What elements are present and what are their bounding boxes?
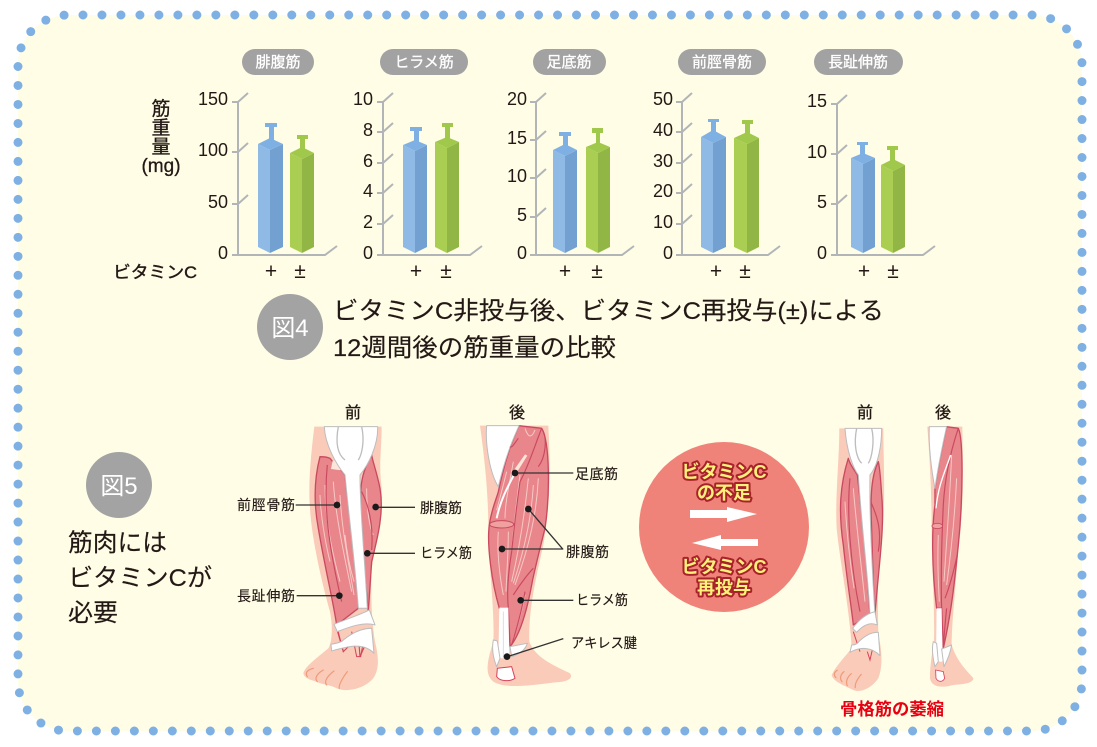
bar chart: soleus: 8	[363, 120, 373, 140]
arrow: to atrophy	[690, 507, 757, 522]
bar chart: plantaris: ±	[591, 260, 603, 283]
figure 5 caption: 筋肉には	[68, 529, 167, 557]
illustration: healthy leg, front: 前脛骨筋	[237, 497, 295, 513]
bar chart: soleus: 0	[363, 243, 373, 263]
bar chart: soleus	[353, 49, 482, 283]
circle: vitamin C deficiency and re-administration: ビタミンC	[682, 556, 766, 577]
illustration: healthy leg, back: 足底筋	[575, 466, 618, 482]
figure 5 badge: 図5	[100, 473, 138, 500]
illustration: healthy leg, back: アキレス腱	[571, 635, 637, 651]
illustration: healthy leg, back: ヒラメ筋	[576, 592, 628, 608]
circle: vitamin C deficiency and re-administration	[639, 442, 809, 612]
illustration: healthy leg, front	[237, 404, 472, 690]
figure 4 caption: 12週間後の筋重量の比較	[333, 334, 616, 362]
bar chart: tibialis anterior: ±	[739, 260, 751, 283]
bar chart: plantaris: 0	[517, 243, 527, 263]
bar chart: soleus: 2	[363, 212, 373, 232]
bar chart: plantaris: 足底筋	[546, 54, 592, 71]
bar chart: extensor digitorum longus: 15	[807, 91, 827, 111]
bar chart: extensor digitorum longus: 10	[807, 142, 827, 162]
figure 4 badge: 図4	[271, 315, 309, 342]
illustration: atrophied leg, back: 後	[935, 404, 951, 422]
bar chart: tibialis anterior: 前脛骨筋	[692, 54, 752, 71]
illustration: healthy leg, back: 後	[509, 404, 525, 422]
y axis title: muscle weight: (mg)	[141, 156, 181, 177]
figure 4 caption: ビタミンC非投与後、ビタミンC再投与(±)による	[333, 297, 884, 325]
bar chart: soleus: 4	[363, 181, 373, 201]
circle: vitamin C deficiency and re-administration: ビタミンC	[682, 461, 766, 482]
circle: vitamin C deficiency and re-administration: 再投与	[697, 578, 751, 598]
bar chart: extensor digitorum longus: 長趾伸筋	[828, 54, 888, 71]
bar chart: plantaris: 20	[507, 89, 527, 109]
bar chart: plantaris: 15	[507, 128, 527, 148]
illustration: healthy leg, front: 前	[345, 404, 361, 422]
figure 5 caption: ビタミンCが	[68, 564, 212, 592]
bar chart: tibialis anterior: 20	[653, 181, 673, 201]
y axis title: muscle weight: 筋	[151, 98, 171, 120]
circle: vitamin C deficiency and re-administration: の不足	[697, 483, 751, 503]
figure 5 badge	[86, 452, 152, 518]
illustration: healthy leg, front: 腓腹筋	[420, 500, 462, 516]
bar chart: tibialis anterior	[653, 49, 780, 283]
row label: vitamin C: ビタミンC	[113, 263, 197, 282]
figure 4 caption	[333, 297, 884, 362]
illustration: atrophied leg, front: 前	[857, 404, 873, 422]
figure 5 caption: 必要	[68, 599, 118, 627]
illustration: atrophied leg, back	[927, 404, 973, 687]
bar chart: soleus: ±	[440, 260, 452, 283]
bar chart: tibialis anterior: 40	[653, 120, 673, 140]
y axis title: muscle weight	[141, 98, 181, 177]
bar chart: soleus: +	[410, 260, 422, 283]
bar chart: gastrocnemius: +	[265, 260, 277, 283]
bar chart: soleus: 6	[363, 151, 373, 171]
figure 4 badge	[257, 294, 323, 360]
bar chart: tibialis anterior: +	[710, 260, 722, 283]
illustration: healthy leg, front: ヒラメ筋	[420, 545, 472, 561]
bar chart: extensor digitorum longus: ±	[887, 260, 899, 283]
bar chart: plantaris: +	[559, 260, 571, 283]
bar chart: extensor digitorum longus: +	[858, 260, 870, 283]
illustration: atrophied leg, front	[832, 404, 884, 691]
illustration: healthy leg, back	[480, 404, 637, 686]
caption: skeletal muscle atrophy: 骨格筋の萎縮	[840, 700, 944, 719]
bar chart: tibialis anterior: 10	[653, 212, 673, 232]
bar chart: tibialis anterior: 0	[663, 243, 673, 263]
bar chart: tibialis anterior: 30	[653, 151, 673, 171]
bar chart: plantaris	[507, 49, 634, 283]
bar chart: gastrocnemius: 150	[198, 89, 228, 109]
y axis title: muscle weight: 量	[151, 137, 171, 158]
bar chart: extensor digitorum longus: 0	[817, 243, 827, 263]
bar chart: gastrocnemius: 50	[208, 192, 228, 212]
figure 5 caption	[68, 529, 212, 627]
bar chart: plantaris: 5	[517, 205, 527, 225]
bar chart: gastrocnemius: ±	[294, 260, 306, 283]
bar chart: gastrocnemius: 0	[218, 243, 228, 263]
illustration: healthy leg, front: 長趾伸筋	[237, 588, 295, 604]
bar chart: gastrocnemius: 腓腹筋	[255, 54, 301, 71]
bar chart: gastrocnemius	[198, 49, 337, 283]
bar chart: extensor digitorum longus: 5	[817, 192, 827, 212]
bar chart: gastrocnemius: 100	[198, 140, 228, 160]
illustration: healthy leg, back: 腓腹筋	[566, 544, 609, 560]
y axis title: muscle weight: 重	[151, 117, 171, 139]
bar chart: tibialis anterior: 50	[653, 89, 673, 109]
bar chart: extensor digitorum longus	[807, 49, 935, 283]
bar chart: soleus: 10	[353, 89, 373, 109]
bar chart: plantaris: 10	[507, 166, 527, 186]
bar chart: soleus: ヒラメ筋	[394, 54, 454, 71]
